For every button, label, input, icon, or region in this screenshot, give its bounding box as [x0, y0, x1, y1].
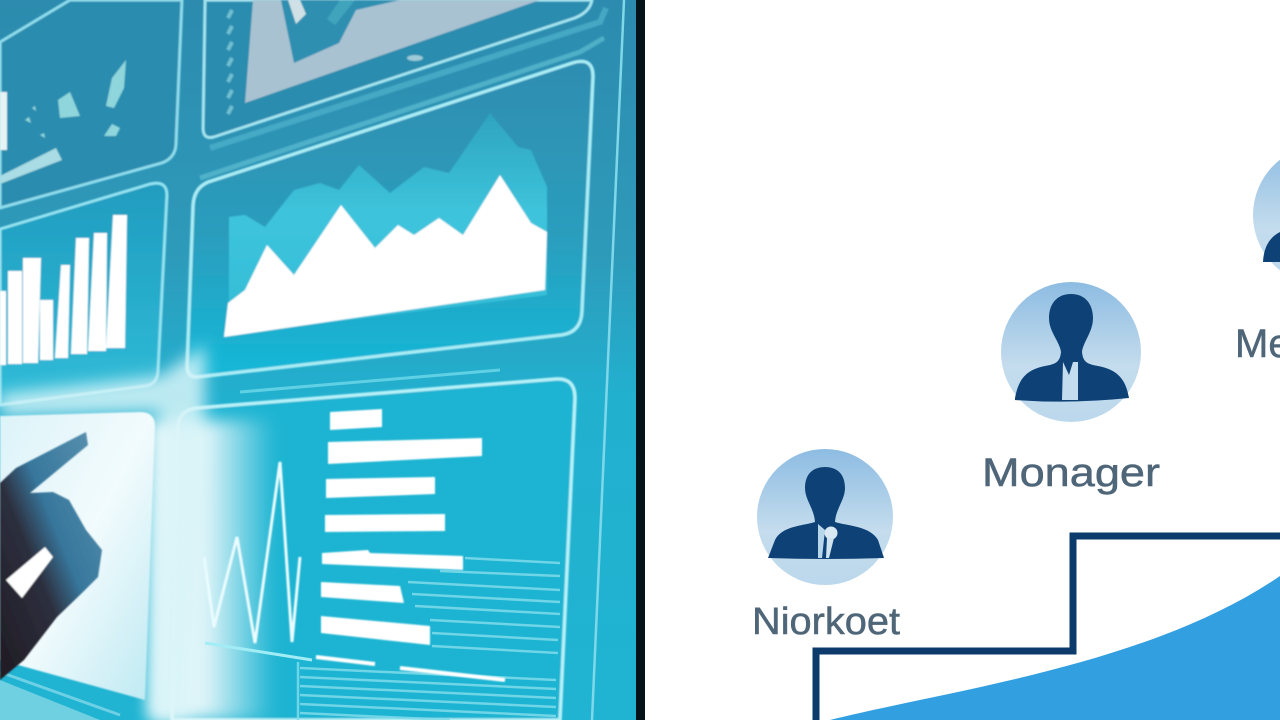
front area series [224, 175, 547, 337]
panel: bar chart screen [0, 183, 167, 405]
panel: top middle screen [203, 0, 606, 148]
grey chart [245, 0, 540, 103]
panel: top left screen [0, 0, 182, 208]
icon: manager avatar [1001, 282, 1141, 422]
icon: entry level avatar [757, 449, 893, 585]
glow band between screens [0, 345, 205, 720]
white vertical bars [0, 215, 127, 365]
striped data lines [298, 558, 560, 720]
white horizontal bars [321, 409, 482, 645]
label: manager: Monager [982, 451, 1160, 495]
label: entry level: Niorkoet [752, 601, 900, 643]
panel: touch screen with hand [0, 345, 205, 720]
speckled map shapes [25, 60, 126, 138]
panel: lower right screen [150, 370, 575, 720]
icon: pointing hand [0, 432, 102, 680]
panel: career ladder [646, 0, 1280, 720]
back area series [229, 113, 547, 335]
icon: third person avatar [1253, 145, 1280, 285]
vertical black divider [636, 0, 645, 720]
panel: area chart screen [187, 38, 604, 377]
panel: photo of dashboard screens [0, 0, 637, 720]
axis ticks [228, 10, 232, 114]
soft white glow [150, 420, 275, 720]
line chart pulse [204, 462, 300, 643]
staircase outline [816, 536, 1280, 720]
right edge light line [592, 0, 624, 720]
blue growth curve [830, 576, 1280, 720]
